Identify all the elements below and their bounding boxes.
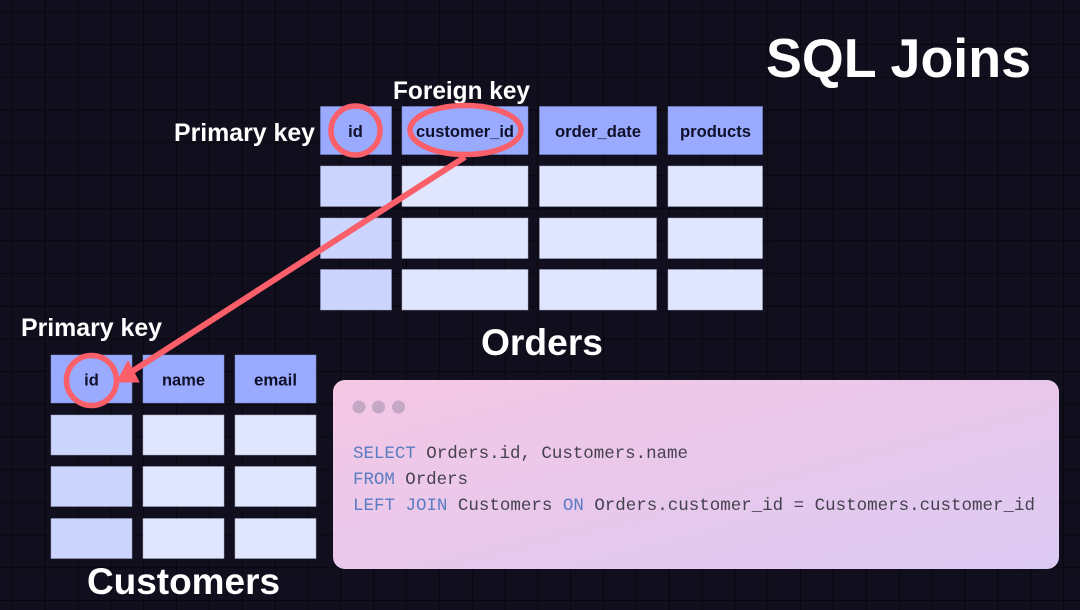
highlight: customer_id ellipse bbox=[410, 106, 521, 154]
customers header row bbox=[51, 355, 316, 403]
orders header row: products bbox=[680, 123, 751, 141]
customers data rows bbox=[51, 415, 316, 558]
orders header row bbox=[320, 106, 762, 154]
label: primary key orders: Primary key bbox=[174, 119, 315, 147]
SQL query text bbox=[353, 444, 1035, 516]
orders header row: id bbox=[348, 123, 363, 141]
label: orders table name: Orders bbox=[481, 322, 603, 363]
panel: orders table bbox=[320, 106, 762, 310]
window dots bbox=[352, 400, 405, 414]
orders header row: order_date bbox=[555, 123, 641, 141]
panel: customers table bbox=[51, 355, 316, 558]
title: SQL Joins bbox=[766, 27, 1031, 89]
highlight: orders id circle bbox=[331, 106, 380, 155]
customers header row: email bbox=[254, 372, 297, 390]
orders data rows bbox=[320, 166, 762, 310]
label: customers table name: Customers bbox=[87, 561, 280, 602]
panel: SQL code window bbox=[333, 380, 1059, 569]
SQL query text: LEFT JOIN Customers ON Orders.customer_id = Customers.customer_id bbox=[353, 496, 1035, 516]
customers header row: name bbox=[162, 372, 205, 390]
label: foreign key: Foreign key bbox=[393, 77, 530, 105]
label: primary key customers: Primary key bbox=[21, 314, 162, 342]
customers header row: id bbox=[84, 372, 99, 390]
highlight: customers id circle bbox=[66, 356, 116, 406]
arrow: foreign key to primary key bbox=[117, 157, 465, 382]
orders header row: customer_id bbox=[416, 123, 514, 141]
SQL query text: SELECT Orders.id, Customers.name bbox=[353, 444, 688, 464]
SQL query text: FROM Orders bbox=[353, 470, 468, 490]
